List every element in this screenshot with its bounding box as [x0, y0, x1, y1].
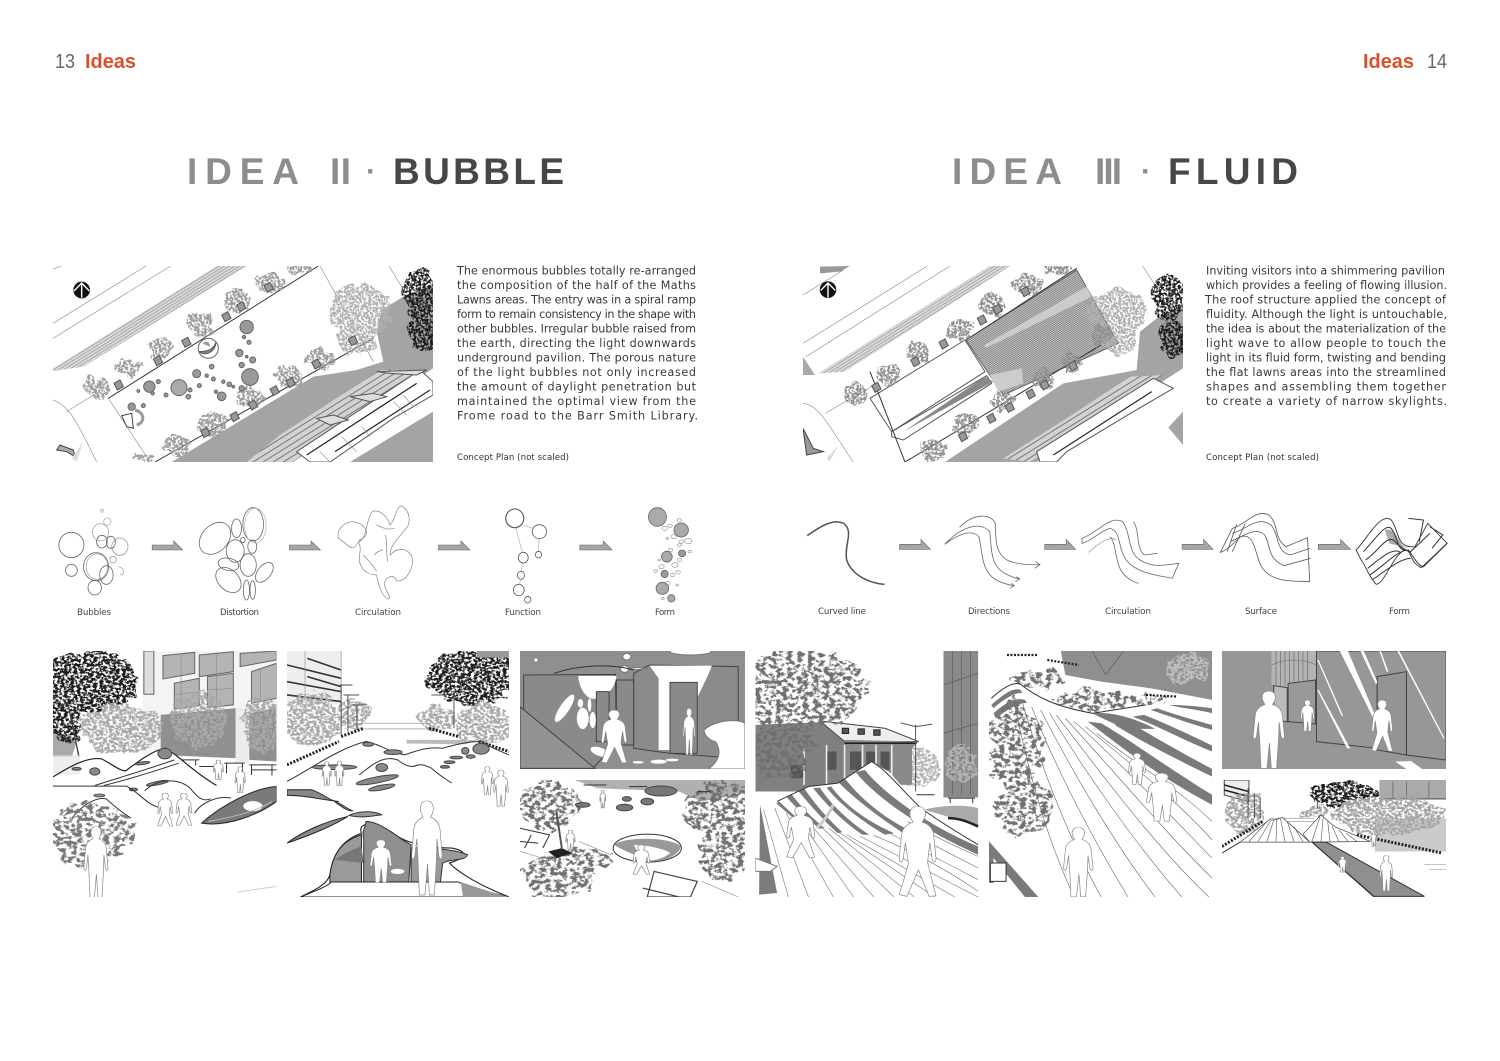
- text block: fluid description: light in its fluid form, twisting and bending: [1206, 351, 1446, 364]
- sketch: bubbles: [59, 509, 128, 595]
- office building: [287, 651, 341, 705]
- dark tree: [404, 270, 439, 350]
- image: fluid roof street view: [1222, 780, 1446, 897]
- text block: fluid description: [1204, 264, 1447, 408]
- light trees: [1223, 793, 1445, 835]
- trees: [83, 260, 334, 463]
- skylight ring: [613, 834, 681, 862]
- doorways: [596, 680, 697, 753]
- people: [322, 761, 508, 895]
- bicycles: [1007, 655, 1177, 697]
- ground shade: [1375, 818, 1446, 851]
- labels: bubble sequence: Circulation: [355, 608, 401, 618]
- ground shade: [945, 305, 1183, 462]
- text block: bubble description: the earth, directing the light downwards: [457, 337, 696, 350]
- image: bubble mounds view 2: [287, 651, 509, 897]
- background ground: [1061, 651, 1212, 700]
- buildings: [1003, 368, 1183, 462]
- labels: bubble sequence: Bubbles: [77, 608, 111, 618]
- north arrow: [820, 281, 836, 298]
- buildings: [247, 368, 433, 462]
- lower left building: [803, 428, 838, 462]
- title: idea III fluid: FLUID: [1168, 151, 1298, 192]
- labels: fluid sequence: Curved line: [818, 607, 866, 617]
- labels: fluid sequence: [818, 607, 1410, 617]
- labels: bubble sequence: [77, 608, 675, 618]
- dark wedge: [759, 805, 777, 895]
- text block: bubble description: Lawns areas. The entry was in a spiral ramp: [457, 293, 696, 306]
- dark tree: [1152, 276, 1188, 356]
- concept plan: bubble: [53, 266, 433, 462]
- title: idea II bubble: [187, 151, 564, 192]
- people: [84, 760, 245, 898]
- image: bubble mounds view 1: [53, 651, 276, 897]
- light strips: [1317, 651, 1445, 769]
- title: idea II bubble: ·: [366, 155, 376, 188]
- page header right: 14: [1427, 51, 1447, 73]
- sketch: circulation: [338, 506, 413, 599]
- striped band: [818, 266, 1010, 373]
- distant skylights: [575, 786, 677, 811]
- image: interior light strips: [1222, 651, 1446, 769]
- foliage: [45, 805, 136, 865]
- ground shade: [172, 283, 433, 462]
- image: fluid roof view 1: [756, 651, 979, 897]
- arrow: [438, 541, 470, 550]
- arrow: [1045, 539, 1076, 549]
- page header left: 13: [55, 51, 75, 73]
- mounds: [53, 748, 276, 897]
- people: [566, 790, 650, 875]
- title: idea III fluid: IDEA: [952, 151, 1062, 192]
- walls and door: [1274, 651, 1446, 760]
- sketch: distortion: [193, 508, 277, 600]
- page header right: Ideas: [1363, 51, 1414, 73]
- foliage: [732, 648, 867, 778]
- text block: bubble description: maintained the optimal view from the: [457, 395, 696, 408]
- concept plan: fluid: [803, 266, 1183, 462]
- large tree: [328, 283, 392, 355]
- title: idea II bubble: BUBBLE: [393, 151, 564, 192]
- dark tree: [427, 649, 517, 704]
- background building: [943, 651, 978, 797]
- people: [1064, 753, 1177, 897]
- arrow: [289, 541, 320, 550]
- text block: fluid description: which provides a feeling of flowing illusion.: [1206, 279, 1447, 292]
- mound: [756, 762, 978, 897]
- dark tree: [1311, 780, 1376, 807]
- bicycles: [1222, 822, 1442, 853]
- page header left: [55, 51, 136, 73]
- labels: bubble sequence: Form: [655, 608, 675, 618]
- heritage house: [756, 721, 919, 791]
- labels: bubble sequence: Distortion: [220, 608, 259, 618]
- text block: fluid description: to create a variety of narrow skylights.: [1206, 395, 1447, 408]
- title: idea II bubble: IDEA: [187, 151, 299, 192]
- text block: bubble description: the composition of the half of the Maths: [457, 279, 696, 292]
- arrow: [900, 539, 930, 549]
- right building: [1379, 780, 1446, 800]
- sketch: function: [506, 509, 547, 603]
- text block: bubble description: form to remain consistency in the shape with: [457, 308, 696, 321]
- planters: [872, 287, 1078, 442]
- diagram: fluid form sequence: [806, 513, 1448, 589]
- image: fluid roof view 2: [989, 651, 1212, 897]
- pavilion walls: [520, 665, 738, 768]
- arrow: [1318, 539, 1350, 549]
- text block: fluid description: fluidity. Although the light is untouchable,: [1206, 308, 1447, 321]
- image: interior light bubbles: [520, 651, 745, 769]
- text block: bubble description: underground pavilion. The porous nature: [457, 351, 696, 364]
- text block: bubble description: [456, 264, 698, 422]
- street lamp: [901, 723, 932, 791]
- sketch: form: [1356, 518, 1447, 584]
- text block: bubble description: the amount of daylight penetration but: [457, 380, 697, 393]
- dark strip: [1312, 842, 1424, 896]
- vaulted ceiling: [1271, 651, 1316, 688]
- text block: fluid description: shapes and assembling them together: [1206, 380, 1446, 393]
- labels: bubble sequence: Function: [505, 608, 541, 618]
- arrow: [1182, 539, 1213, 549]
- lower left building: [57, 442, 83, 462]
- text block: bubble description: other bubbles. Irregular bubble raised from: [457, 322, 696, 335]
- dark stripes: [776, 767, 978, 855]
- title: idea III fluid: ·: [1141, 155, 1151, 188]
- fluid roof: [966, 270, 1118, 395]
- light patches: [551, 666, 712, 764]
- spiral ramp: [122, 410, 143, 428]
- sketch: directions: [945, 516, 1040, 588]
- ceiling skylights: [534, 648, 711, 672]
- trees: [842, 262, 1113, 461]
- dark stripes: [991, 689, 1212, 805]
- page header right: [1363, 51, 1447, 73]
- bubbles: [128, 320, 258, 410]
- labels: fluid sequence: Circulation: [1105, 607, 1151, 617]
- pyramids: [1240, 815, 1370, 842]
- text block: fluid description: light wave to allow people to touch the: [1206, 337, 1446, 350]
- image: overhead skylight view: [520, 780, 745, 897]
- parking: [1087, 422, 1183, 462]
- light trees: [81, 692, 282, 753]
- diagram: bubble form sequence: [58, 505, 692, 604]
- sketch: curved line: [807, 522, 884, 584]
- page header left: Ideas: [85, 51, 136, 73]
- north arrow: [73, 282, 90, 298]
- labels: fluid sequence: Directions: [968, 607, 1010, 617]
- lens skylight: [202, 786, 276, 824]
- text block: fluid description: The roof structure applied the concept of: [1204, 293, 1447, 306]
- labels: fluid sequence: Surface: [1245, 607, 1277, 617]
- bicycles: [287, 728, 509, 765]
- text block: fluid description: the idea is about the materialization of the: [1206, 322, 1446, 335]
- arrow: [152, 541, 183, 550]
- foliage: [520, 780, 756, 900]
- office building: [53, 651, 276, 763]
- roof surface: [989, 683, 1212, 897]
- title: idea III fluid: III: [1095, 151, 1122, 192]
- text block: fluid description: Inviting visitors into a shimmering pavilion: [1206, 264, 1445, 277]
- fine lines: [1014, 700, 1212, 897]
- striped band: [53, 266, 247, 371]
- lawn and ramp: [870, 340, 993, 440]
- caption: fluid plan: Concept Plan (not scaled): [1206, 453, 1319, 463]
- lower forms: [287, 790, 509, 897]
- planters: [114, 282, 358, 438]
- title: idea II bubble: II: [330, 151, 351, 192]
- text block: bubble description: of the light bubbles not only increased: [457, 366, 696, 379]
- people: [601, 708, 745, 769]
- large tree: [1087, 288, 1147, 355]
- foliage: [989, 700, 1050, 841]
- sketch: surface: [1220, 513, 1311, 582]
- light trees: [899, 743, 977, 788]
- left building: [1224, 780, 1249, 802]
- labels: fluid sequence: Form: [1389, 607, 1410, 617]
- caption: bubble plan: Concept Plan (not scaled): [457, 453, 569, 463]
- parking: [350, 418, 433, 462]
- shadow foliage: [1009, 670, 1160, 709]
- arrow: [580, 541, 612, 550]
- title: idea III fluid: [952, 151, 1298, 192]
- text block: bubble description: Frome road to the Barr Smith Library.: [457, 409, 698, 422]
- people: [1253, 691, 1393, 768]
- people: [1338, 832, 1393, 891]
- benches: [520, 828, 697, 897]
- bottom wedge: [989, 841, 1038, 897]
- mounds: [287, 740, 509, 792]
- small mound: [72, 794, 131, 820]
- people: [756, 806, 936, 896]
- text block: fluid description: the flat lawns areas into the streamlined: [1206, 366, 1446, 379]
- text block: bubble description: The enormous bubbles totally re-arranged: [456, 264, 696, 277]
- light trees: [285, 690, 513, 747]
- furniture: [181, 760, 276, 775]
- sketch: form: [648, 508, 692, 602]
- dark tree: [43, 650, 138, 743]
- sketch: circulation: [1082, 520, 1179, 583]
- ridge and fan lines: [777, 762, 978, 845]
- distant trees: [1164, 653, 1209, 683]
